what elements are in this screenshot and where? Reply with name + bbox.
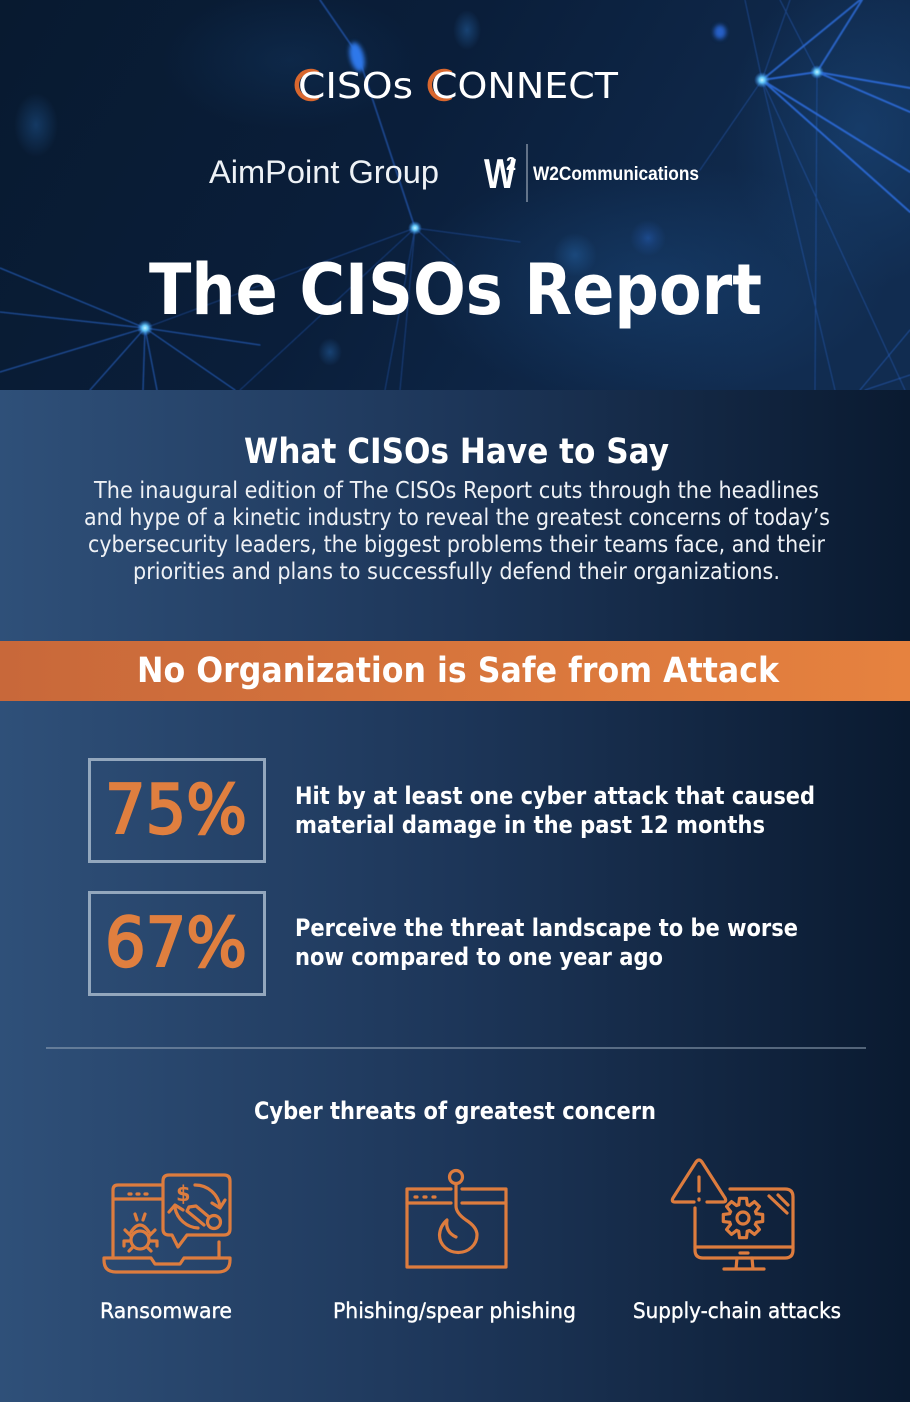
stat: 75% (90, 760, 815, 862)
stat: 75%: 75% (105, 771, 247, 850)
title: The CISOs Report (149, 249, 762, 331)
label: Ransomware: Ransomware (100, 1299, 232, 1323)
intro paragraph (84, 478, 830, 585)
logo: W2Communications: W (484, 150, 516, 197)
banner: No Organization is Safe from Attack (0, 641, 910, 701)
logo: CISOs Connect (297, 66, 619, 107)
stat: 75%: Hit by at least one cyber attack that caused (295, 782, 815, 810)
logo: W2Communications: 2 (506, 154, 516, 174)
intro paragraph: cybersecurity leaders, the biggest problems their teams face, and their (88, 532, 825, 558)
logo: AimPoint Group: AimPoint Group (209, 154, 439, 190)
stat: 75%: material damage in the past 12 months (295, 811, 765, 839)
stat: 67% (90, 892, 798, 994)
logo: CISOs Connect: CONNECT (431, 66, 619, 107)
panel: header network background (0, 0, 910, 400)
icon: ransomware laptop (104, 1175, 230, 1272)
panel: main body background (0, 390, 910, 1402)
stat: 67%: Perceive the threat landscape to be worse (295, 914, 798, 942)
logo: CISOs Connect: CISOs (298, 66, 413, 107)
label: Supply-chain attacks: Supply-chain attacks (633, 1299, 841, 1323)
logo: W2Communications: W2Communications (533, 164, 699, 185)
intro paragraph: priorities and plans to successfully defend their organizations. (133, 559, 780, 585)
heading: Cyber threats of greatest concern: Cyber threats of greatest concern (254, 1097, 656, 1125)
intro paragraph: and hype of a kinetic industry to reveal the greatest concerns of today’s (84, 505, 830, 531)
banner: No Organization is Safe from Attack: No Organization is Safe from Attack (137, 651, 780, 691)
icon: supply-chain attack monitor (672, 1160, 793, 1269)
heading: What CISOs Have to Say: What CISOs Have to Say (244, 432, 669, 472)
icon: ransomware laptop: $ (176, 1182, 191, 1206)
label: Phishing/spear phishing: Phishing/spear phishing (333, 1299, 576, 1323)
logo: W2Communications (484, 144, 699, 202)
stat: 67%: 67% (105, 904, 247, 983)
stat: 67%: now compared to one year ago (295, 943, 663, 971)
intro paragraph: The inaugural edition of The CISOs Report cuts through the headlines (93, 478, 819, 504)
icon: phishing hook window (407, 1170, 506, 1267)
